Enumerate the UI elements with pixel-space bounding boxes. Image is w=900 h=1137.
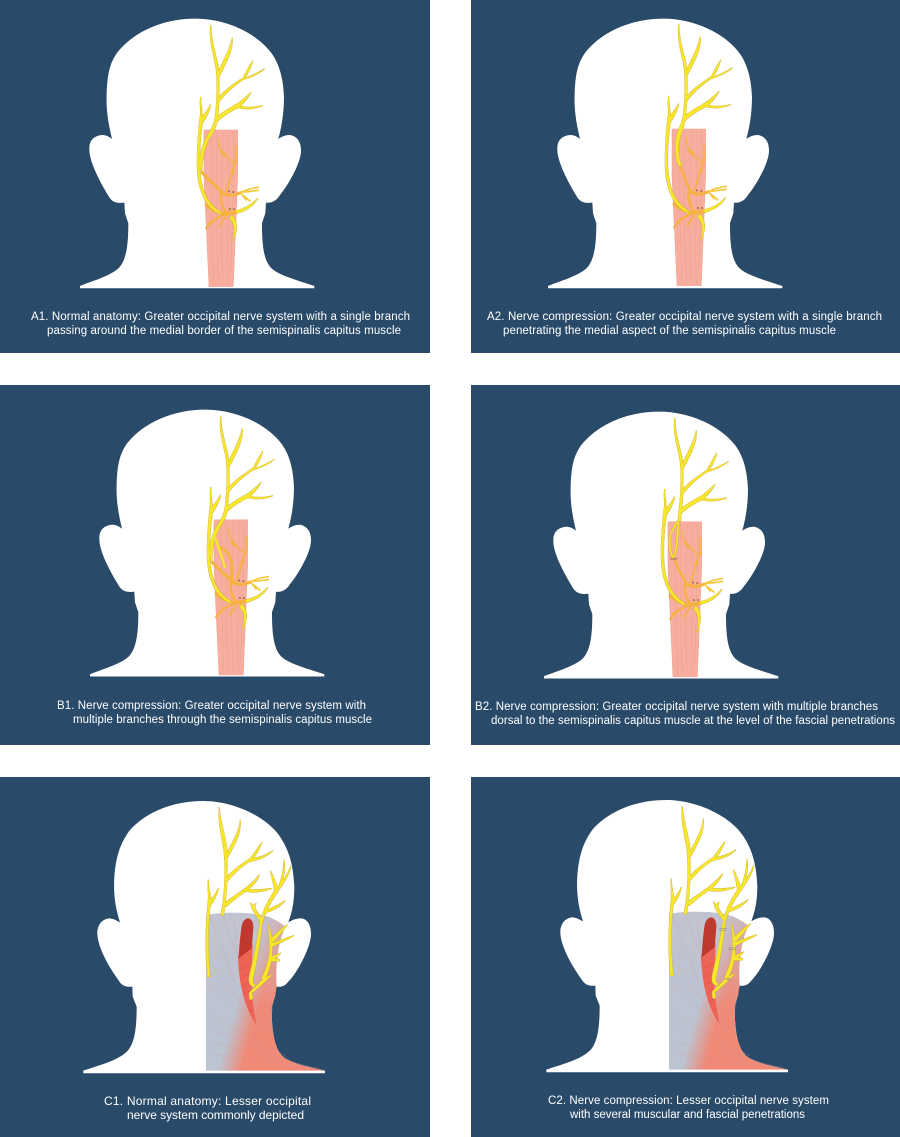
nerve and muscle illustration A2 [665, 24, 732, 286]
head silhouette C2 [546, 800, 788, 1072]
panel: A2 nerve compression [471, 0, 900, 353]
caption B2: B2. Nerve compression: Greater occipital nerve system with multiple branches [475, 701, 878, 713]
nerve and muscle illustration B2 [661, 418, 728, 677]
caption C2: with several muscular and fascial penetrations [569, 1109, 805, 1121]
caption C1: nerve system commonly depicted [127, 1108, 304, 1122]
neck muscles and lesser occipital nerve C2 [669, 806, 788, 1070]
caption B1: multiple branches through the semispinalis capitus muscle [73, 714, 372, 726]
caption C1: C1. Normal anatomy: Lesser occipital [104, 1094, 311, 1108]
nerve and muscle illustration A1 [197, 25, 264, 287]
caption A2: penetrating the medial aspect of the semispinalis capitus muscle [503, 325, 836, 337]
nerve and muscle illustration B1 [207, 416, 274, 675]
panel: A1 normal anatomy [0, 0, 430, 353]
caption B2: dorsal to the semispinalis capitus muscle at the level of the fascial penetrations [491, 715, 895, 727]
neck muscles and lesser occipital nerve C1 [206, 807, 325, 1071]
panel: B1 nerve compression [0, 385, 430, 745]
panel: C2 nerve compression [471, 777, 900, 1137]
head silhouette A1 [80, 19, 314, 288]
caption B1: B1. Nerve compression: Greater occipital nerve system with [57, 700, 366, 712]
head silhouette B2 [544, 412, 778, 679]
panel: B2 nerve compression [471, 385, 900, 745]
head silhouette C1 [83, 801, 325, 1073]
caption A1: A1. Normal anatomy: Greater occipital nerve system with a single branch [31, 311, 410, 323]
caption C2: C2. Nerve compression: Lesser occipital nerve system [548, 1095, 829, 1107]
caption A2: A2. Nerve compression: Greater occipital nerve system with a single branch [487, 311, 882, 323]
caption A1: passing around the medial border of the semispinalis capitus muscle [47, 325, 401, 337]
head silhouette B1 [90, 410, 324, 677]
head silhouette A2 [548, 19, 782, 288]
panel: C1 normal anatomy [0, 777, 430, 1137]
